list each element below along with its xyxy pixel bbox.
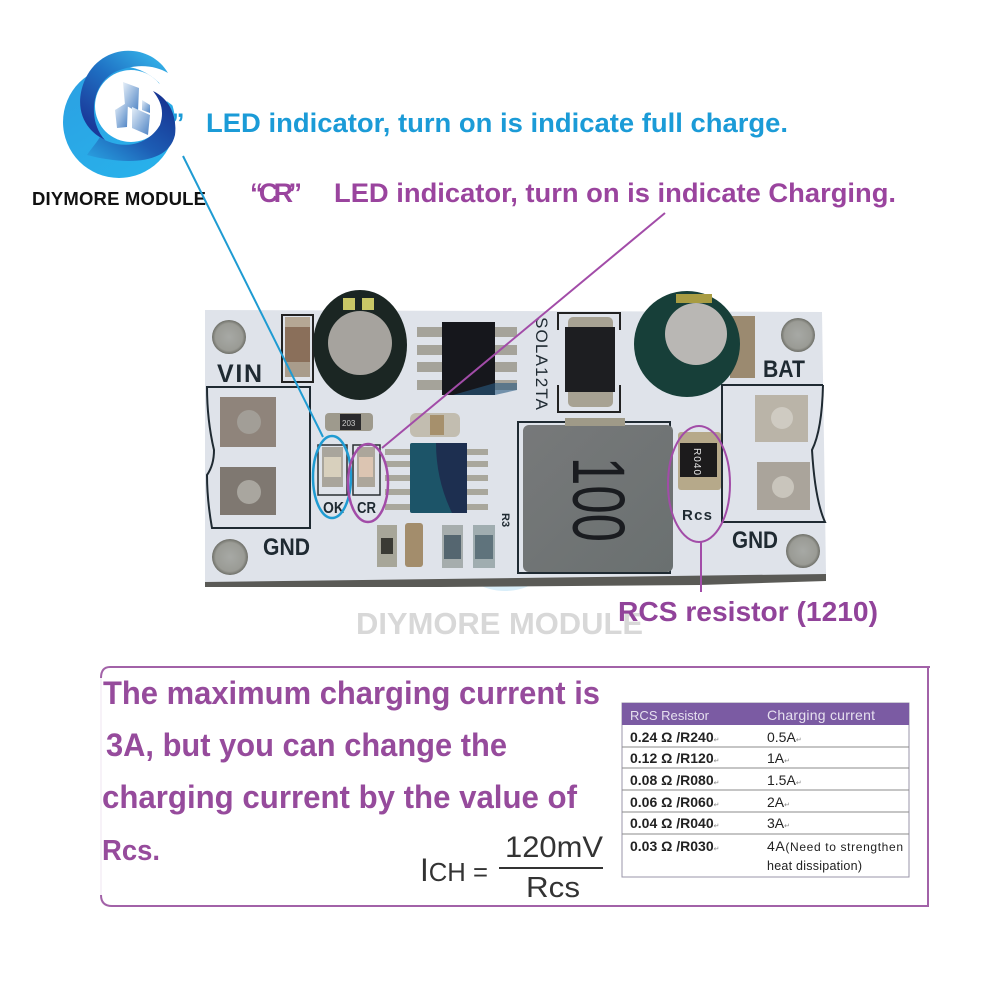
table: RCS resistor values: 1A↵ bbox=[767, 750, 790, 766]
table: RCS resistor values: 0.12 Ω /R120↵ bbox=[630, 750, 720, 766]
panel: charging current bbox=[101, 667, 930, 906]
logo wordmark: DIYMORE MODULE bbox=[32, 188, 206, 209]
formula bbox=[420, 831, 603, 904]
table: RCS resistor values: 0.06 Ω /R060↵ bbox=[630, 794, 720, 810]
heading: OK quote mark under logo: “OK” bbox=[117, 108, 184, 138]
small parts bbox=[325, 413, 373, 431]
highlight ellipse: OK LED bbox=[313, 436, 351, 518]
table: RCS resistor values: 2A↵ bbox=[767, 794, 790, 810]
text block: maximum charging current bbox=[102, 675, 600, 867]
silkscreen labels: Rcs bbox=[682, 507, 712, 524]
leader line: CR bbox=[382, 213, 665, 448]
capacitors bbox=[282, 315, 313, 382]
mounting holes bbox=[212, 318, 820, 575]
table: RCS resistor values: RCS Resistor bbox=[630, 708, 710, 723]
photo: PCB module: R040 bbox=[691, 448, 702, 475]
table: RCS resistor values: 0.5A↵ bbox=[767, 729, 802, 745]
silkscreen labels: BAT bbox=[763, 356, 805, 383]
table: RCS resistor values: 0.24 Ω /R240↵ bbox=[630, 729, 720, 745]
text block: maximum charging current: 3A, but you can change the bbox=[106, 727, 507, 763]
LEDs bbox=[322, 447, 343, 487]
table: RCS resistor values: 1.5A↵ bbox=[767, 772, 802, 788]
silkscreen labels: VIN bbox=[217, 360, 262, 388]
formula: 120mV bbox=[505, 831, 603, 864]
silkscreen labels: OK bbox=[323, 500, 344, 517]
table: RCS resistor values: 0.03 Ω /R030↵ bbox=[630, 838, 720, 854]
terminal VIN bbox=[206, 387, 310, 528]
IC U1 bbox=[417, 327, 517, 390]
terminal BAT bbox=[722, 385, 825, 522]
table: RCS resistor values bbox=[622, 703, 909, 877]
silkscreen labels: SOLA12TA bbox=[532, 317, 551, 411]
inductor bbox=[518, 422, 670, 573]
leader line: OK bbox=[183, 156, 323, 437]
table: RCS resistor values: 3A↵ bbox=[767, 815, 790, 831]
heading: CR LED indicator: “CR” bbox=[250, 178, 302, 208]
silkscreen labels: GND bbox=[732, 527, 778, 554]
table: RCS resistor values: heat dissipation) bbox=[767, 859, 862, 873]
photo: PCB module bbox=[205, 290, 826, 591]
highlight ellipse: Rcs bbox=[668, 426, 730, 542]
text block: maximum charging current: Rcs. bbox=[102, 835, 160, 867]
silkscreen labels: R3 bbox=[499, 513, 511, 527]
watermark: DIYMORE MODULE bbox=[356, 606, 643, 641]
table: RCS resistor values: 0.08 Ω /R080↵ bbox=[630, 772, 720, 788]
table: RCS resistor values: 0.04 Ω /R040↵ bbox=[630, 815, 720, 831]
heading: OK LED indicator: LED indicator, turn on is indicate full charge. bbox=[206, 108, 788, 138]
silkscreen labels: CR bbox=[357, 500, 376, 517]
label: RCS resistor: RCS resistor (1210) bbox=[618, 596, 878, 627]
IC U2 bbox=[385, 449, 488, 510]
heading: CR LED indicator: LED indicator, turn on is indicate Charging. bbox=[334, 178, 896, 208]
formula: ICH = bbox=[420, 852, 488, 888]
silkscreen labels: GND bbox=[263, 534, 310, 561]
photo: PCB module: 203 bbox=[342, 419, 356, 428]
text block: maximum charging current: The maximum charging current is bbox=[103, 675, 600, 711]
diode bbox=[558, 313, 620, 412]
leader line: Rcs bbox=[700, 542, 702, 592]
text block: maximum charging current: charging current by the value of bbox=[102, 779, 577, 815]
photo: PCB module: 100 bbox=[557, 457, 640, 542]
table: RCS resistor values: 4A(Need to strengthen bbox=[767, 838, 903, 854]
logo: company mark bbox=[63, 51, 186, 178]
table: RCS resistor values: Charging current bbox=[767, 707, 875, 723]
silkscreen labels bbox=[217, 317, 805, 561]
Rcs resistor bbox=[678, 432, 721, 490]
highlight ellipse: CR LED bbox=[348, 444, 388, 522]
formula: Rcs bbox=[526, 872, 580, 904]
